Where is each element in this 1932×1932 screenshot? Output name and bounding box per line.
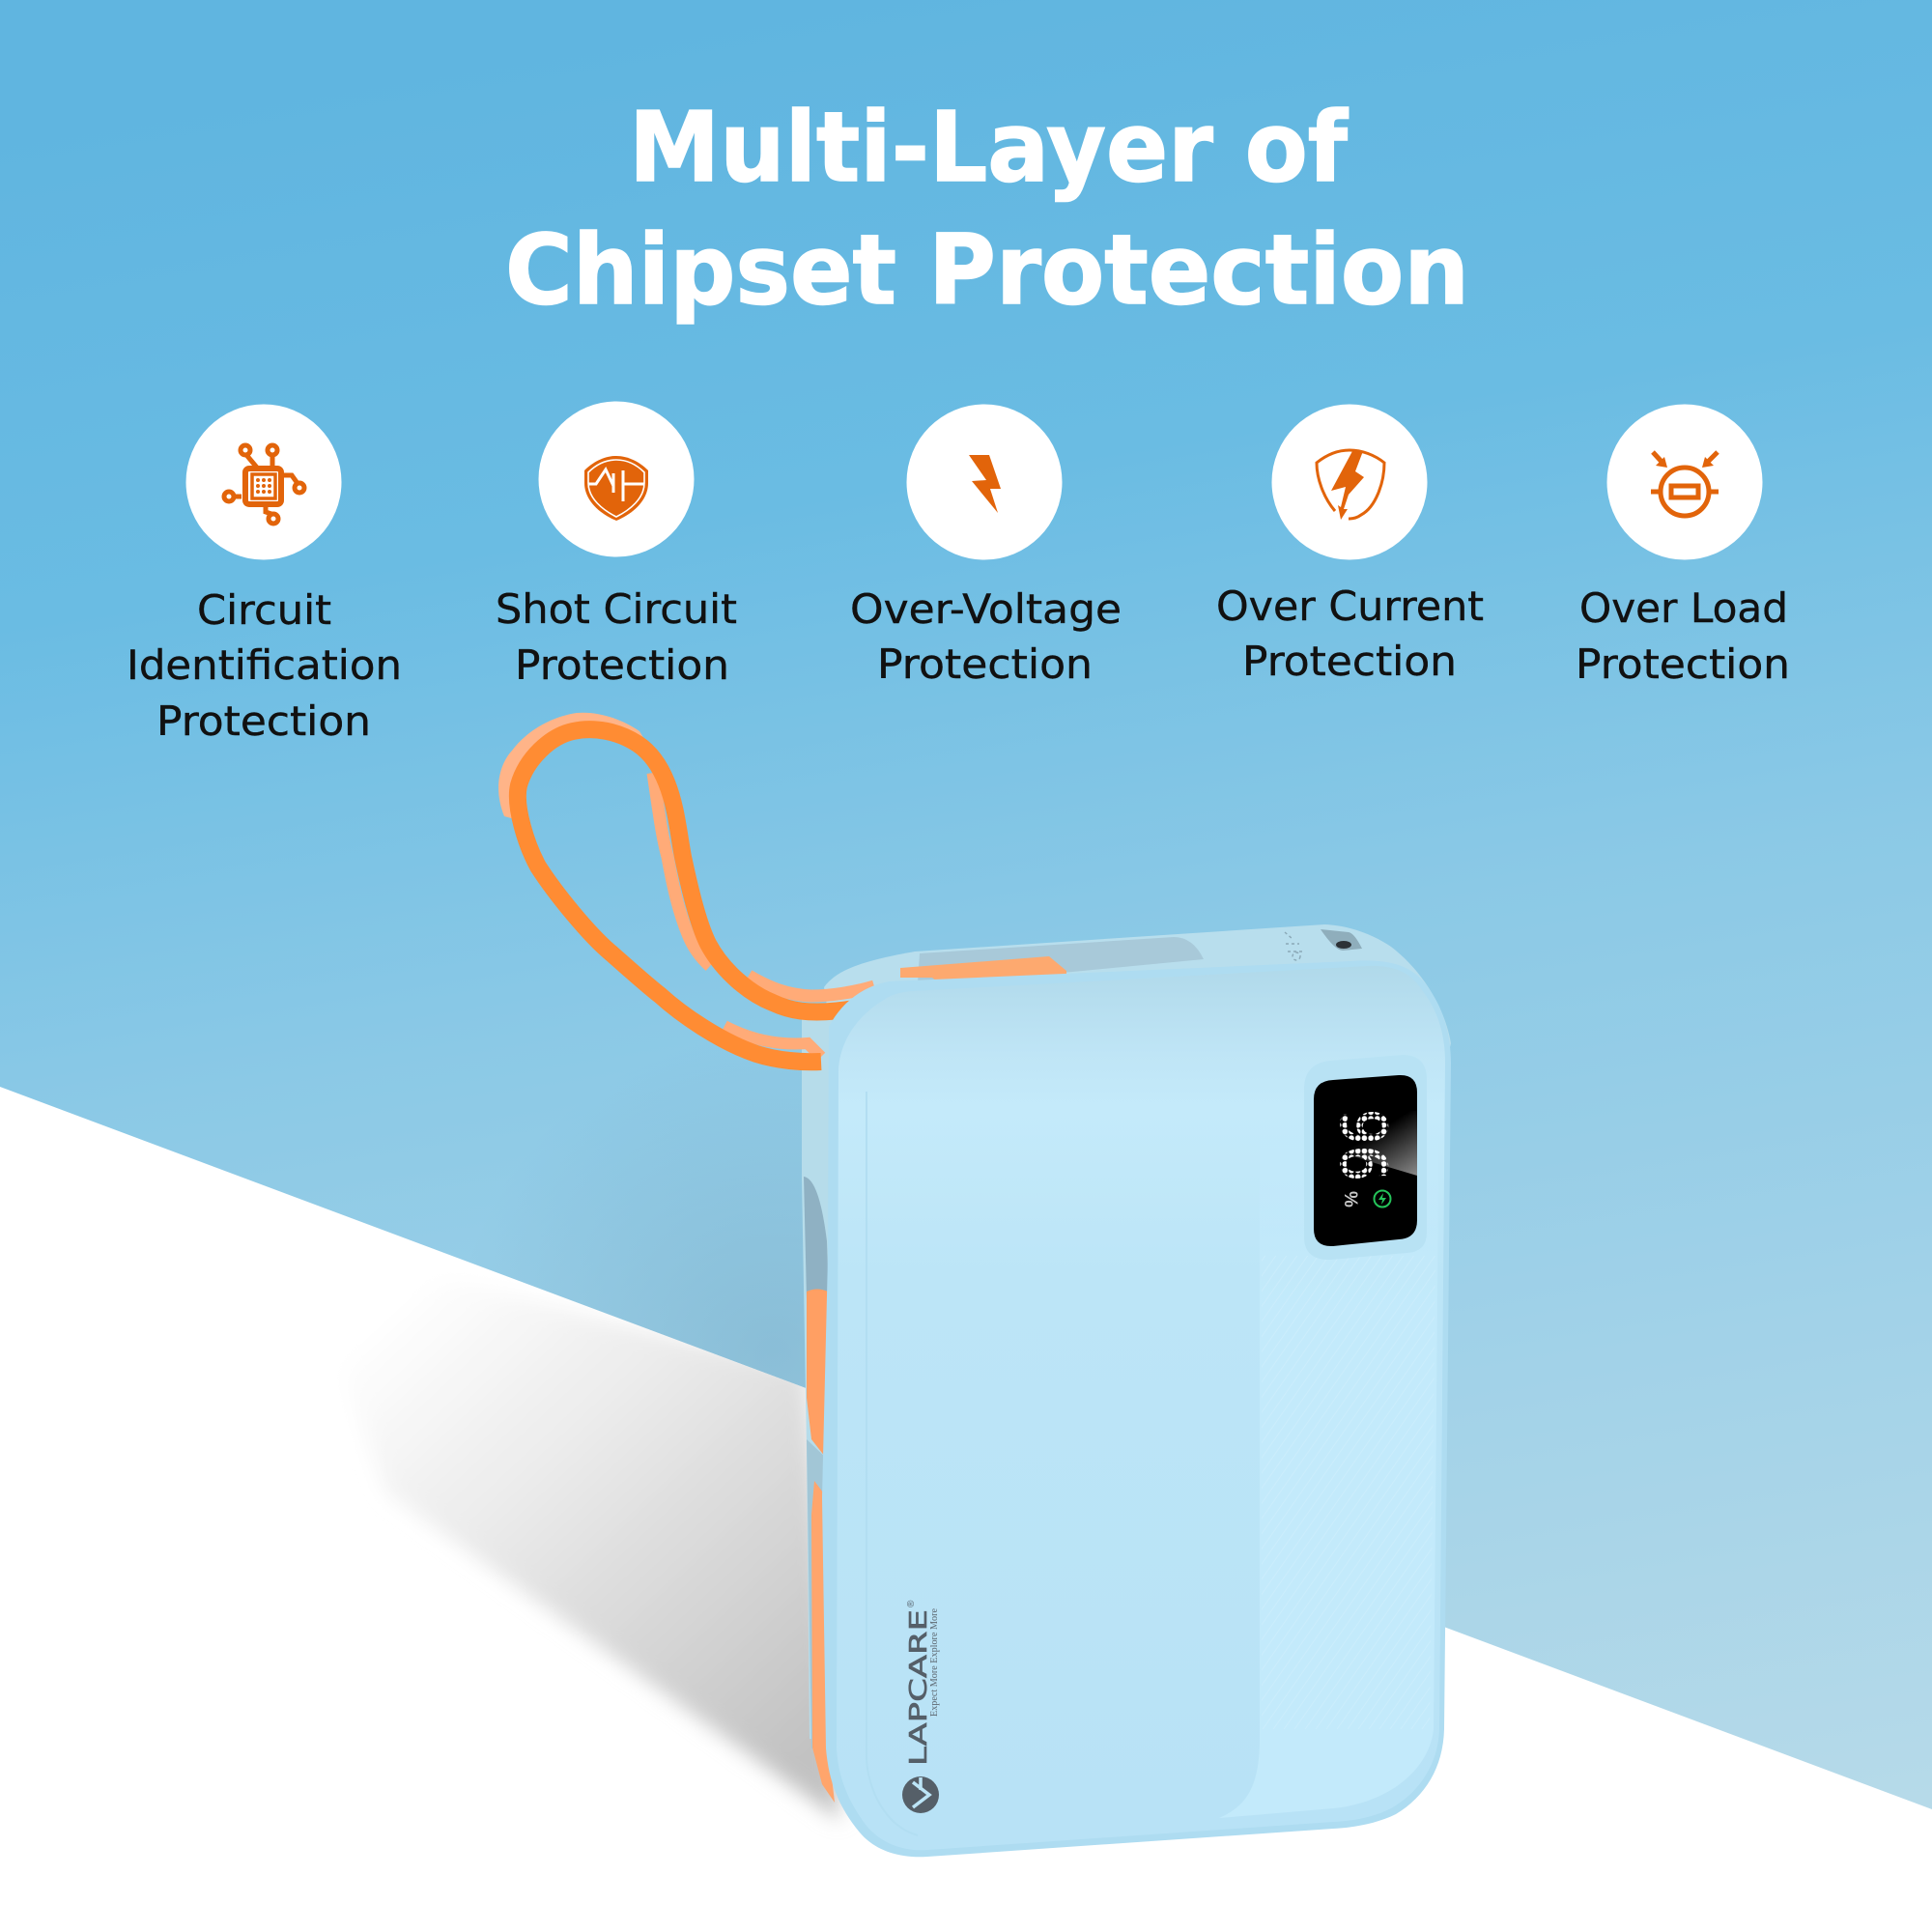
title: Multi-Layer of [629,91,1349,204]
label: Protection [877,640,1093,688]
label: Over Load [1579,584,1788,632]
label: Protection [1576,640,1790,688]
label: Protection [1242,638,1457,685]
label: Protection [156,697,371,745]
lower side groove [807,1439,827,1748]
label: Identification [127,641,402,689]
port symbol [1285,932,1304,960]
feature: over load protection [1576,404,1790,688]
rear body top edge [824,924,1451,1092]
inner panel seam [867,1092,918,1835]
icon: shield with bolt [1271,404,1428,560]
feature: short circuit protection [496,402,737,689]
cable slot [918,937,1204,983]
label: Circuit [197,586,331,634]
title [505,91,1469,327]
icon: charging [1374,1190,1391,1208]
product: power bank [498,713,1451,1857]
textured right panel [1219,1072,1439,1818]
product shadow on floor [384,1313,846,1822]
registered mark: ® [906,1600,917,1607]
feature: circuit identification protection [127,404,402,745]
orange side tab [807,1289,829,1462]
label: Over-Voltage [850,585,1122,633]
wordmark: LAPCARE [904,1609,932,1766]
white floor wedge [0,1087,1932,1932]
icon: circuit chip [185,404,342,560]
label [850,585,1122,688]
cable tab in slot [900,956,1066,987]
feature: over-voltage protection [850,404,1122,688]
label: Shot Circuit [496,585,737,633]
logo mark [902,1776,939,1813]
wall shading near the product [454,1034,1092,1671]
display bezel [1304,1055,1427,1260]
front frame [822,960,1451,1857]
icon: lightning bolt [906,404,1063,560]
label: Protection [515,641,729,689]
orange side strip lower [811,1481,835,1803]
label: Over Current [1216,582,1484,630]
notch shadow [804,1177,829,1299]
feature: over current protection [1216,404,1484,685]
display screen [1314,1075,1417,1246]
label [127,586,402,745]
title: Chipset Protection [505,213,1469,327]
percent sign: % [1340,1191,1360,1208]
USB-C port [1321,929,1362,951]
icon: overload fuse [1607,404,1762,560]
battery reading: 96 [1326,1109,1398,1181]
cable loop, light edge [498,713,874,1057]
icon: shield with circuit symbol [539,402,694,556]
label [1576,584,1790,688]
cable loop [518,729,855,1062]
tagline: Expect More Explore More [928,1608,940,1717]
brand logo [902,1600,940,1813]
label [1216,582,1484,685]
side strip [802,1014,833,1739]
label [496,585,737,689]
front face [837,966,1445,1850]
